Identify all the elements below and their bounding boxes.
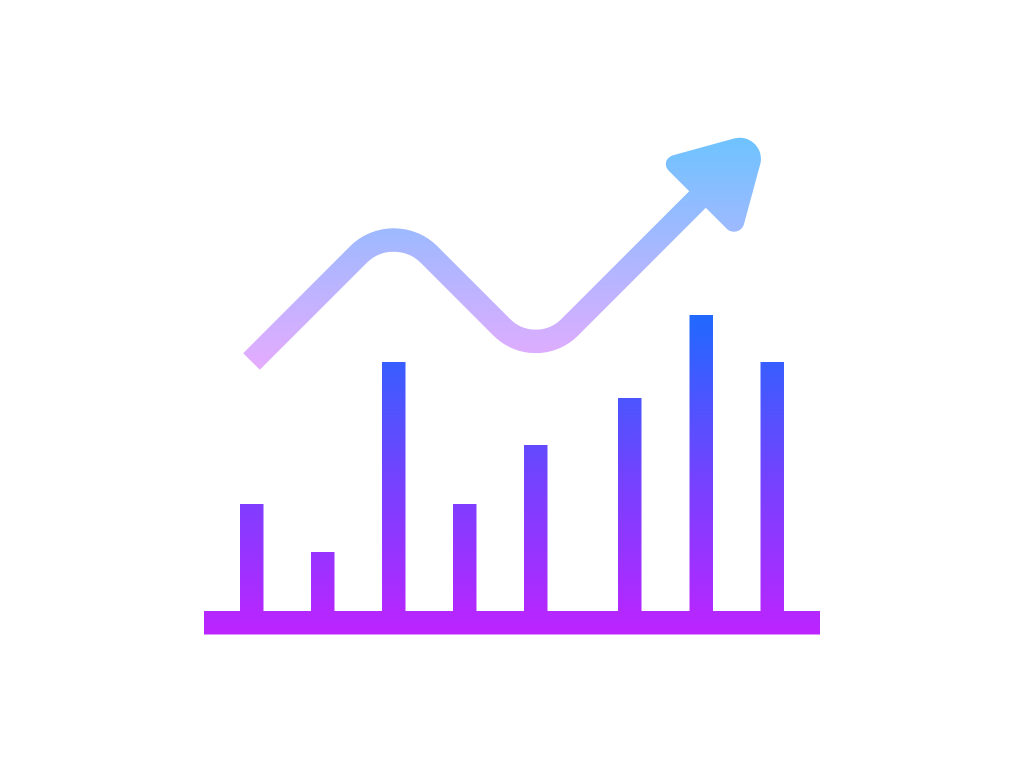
- bar 1: [240, 504, 264, 614]
- bar 6: [618, 398, 642, 614]
- trend arrow: [252, 138, 761, 362]
- baseline: [204, 611, 820, 634]
- bar 4: [453, 504, 476, 614]
- bar chart: [204, 315, 820, 634]
- arrow line: [252, 192, 705, 362]
- bar 5: [524, 445, 548, 614]
- bar 8: [760, 362, 784, 614]
- bar 2: [311, 552, 334, 614]
- arrow head: [666, 138, 761, 232]
- bar 7: [690, 315, 713, 614]
- bar 3: [382, 362, 406, 614]
